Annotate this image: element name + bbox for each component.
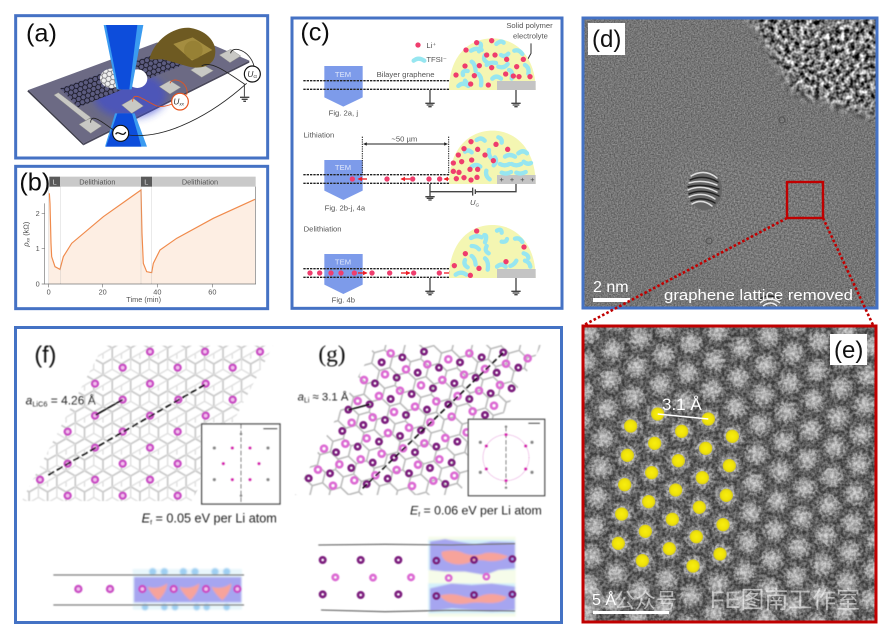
formation energy: E <box>142 511 151 525</box>
electrolyte dome <box>449 131 536 184</box>
delithiation label: Delithiation <box>304 225 342 234</box>
resistivity curve <box>49 190 255 273</box>
label: lattice constant: Li <box>304 398 310 405</box>
icon: gate voltage meter: U <box>247 69 253 79</box>
icon: gate voltage meter <box>244 66 260 82</box>
TEM window: TEM <box>335 70 351 79</box>
yellow lithium markers <box>612 407 739 573</box>
lithium lattice region <box>662 150 848 280</box>
legend: Li+ and TFSI- <box>414 41 447 64</box>
axis tick labels: 20 <box>99 287 107 296</box>
label: lattice constant: a <box>298 391 304 403</box>
gate circuit <box>425 184 516 207</box>
heading: (d): (d) <box>592 26 621 53</box>
axis tick labels: 40 <box>153 287 161 296</box>
ground symbol <box>240 97 249 101</box>
axis tick labels: 0 <box>47 287 51 296</box>
bilayer graphene lines <box>303 81 449 89</box>
zoom connector lines <box>584 218 873 325</box>
phase header bars: Delithiation <box>79 177 115 186</box>
measurement: 3.1 angstrom <box>658 395 708 419</box>
small defect clusters <box>644 117 785 306</box>
dashed line and lattice vector <box>348 351 505 488</box>
ground symbols <box>425 278 521 295</box>
icon: AC source <box>113 125 129 141</box>
lithiation label: Lithiation <box>304 130 334 139</box>
amorphous region top right <box>743 20 876 126</box>
watermark <box>578 587 860 614</box>
gate circuit: G <box>476 202 480 207</box>
panel: (b) resistivity chart <box>16 166 268 309</box>
structure (f) <box>20 341 280 610</box>
label: lattice constant: = 4.26 Å <box>47 392 96 407</box>
electrolyte dome <box>449 38 536 90</box>
TEM window: TEM <box>335 163 351 172</box>
panel border <box>583 18 877 308</box>
electrolyte label <box>506 21 553 61</box>
heading: (g): (g) <box>318 342 346 368</box>
axis title: time: Time (min) <box>126 295 161 304</box>
axis tick labels: 0 <box>36 280 40 289</box>
label: lattice constant: LiC6 <box>32 400 47 409</box>
graphene ribbon <box>60 53 187 107</box>
axes and ticks <box>42 187 256 287</box>
structure (g) <box>295 342 545 617</box>
heading: (e) <box>830 334 867 365</box>
axis title: resistivity: (kΩ) <box>21 222 30 238</box>
heading: (a): (a) <box>26 19 57 47</box>
bilayer graphene lines <box>303 269 449 277</box>
formation energy: f <box>418 512 420 519</box>
electrolyte label: electrolyte <box>513 31 548 40</box>
state: pristine <box>303 38 536 118</box>
heading: (f): (f) <box>34 341 56 367</box>
device substrate <box>27 39 249 145</box>
axis title: resistivity: xx <box>26 237 31 242</box>
formation energy: f <box>150 520 152 527</box>
phase header bars <box>49 177 256 187</box>
icon: longitudinal voltage meter <box>172 93 188 110</box>
label: lattice constant: a <box>26 393 33 407</box>
electrolyte dome: + <box>500 175 504 184</box>
icon: longitudinal voltage meter: U <box>173 97 179 107</box>
axis tick labels: 1 <box>36 244 40 253</box>
bilayer graphene label: Bilayer graphene <box>377 70 435 79</box>
polymer electrolyte dome <box>149 28 215 68</box>
state: delithiation <box>303 225 536 304</box>
panel: (f)(g) simulated structures <box>16 328 562 622</box>
axis tick labels <box>36 209 216 296</box>
scale bar: 2 nm: 2 nm <box>593 279 629 296</box>
measurement wiring <box>91 49 254 136</box>
electrolyte dome: + <box>520 175 524 184</box>
panel: (d) TEM image <box>583 18 877 308</box>
contact bar and pads <box>54 49 241 133</box>
TEM window <box>324 160 363 200</box>
scale bar: 5 angstrom: 5 Å <box>592 590 616 609</box>
heading: (b): (b) <box>19 168 50 196</box>
icon: gate voltage meter: G <box>253 74 257 80</box>
amorphous particle <box>688 170 722 210</box>
scale bar: 5 angstrom <box>592 590 669 614</box>
measurement: 3.1 angstrom: 3.1 Å <box>662 395 702 414</box>
LiC6 lattice <box>20 345 277 502</box>
50 micron dimension <box>362 134 449 175</box>
dense lithium lattice <box>295 345 542 495</box>
zoom region marker <box>787 182 823 218</box>
orange voltage wires <box>133 80 187 106</box>
formation energy: E <box>410 503 419 517</box>
charge density map <box>133 568 242 610</box>
area under curve <box>49 190 255 284</box>
figure reference: Fig. 2b-j, 4a <box>325 204 366 213</box>
TEM holes <box>100 69 147 88</box>
electrolyte dome <box>449 225 536 278</box>
panel: (e) magnified lattice <box>578 326 876 622</box>
legend: Li+ and TFSI-: TFSI⁻ <box>426 55 447 64</box>
red arrows: outward <box>358 271 453 275</box>
phase header bars: Delithiation <box>182 177 218 186</box>
intercalated lithium <box>350 176 442 182</box>
charge density map <box>428 537 516 617</box>
bilayer graphene lines <box>303 175 449 183</box>
electron beam <box>104 25 147 147</box>
heading: (d) <box>588 23 625 55</box>
diffraction inset <box>202 424 280 504</box>
gate circuit: U <box>470 198 476 207</box>
TEM window: TEM <box>335 257 351 266</box>
state: lithiation <box>303 130 536 213</box>
50 micron dimension: ~50 µm <box>391 134 417 143</box>
axis tick labels: 2 <box>36 209 40 218</box>
red arrows: inward <box>358 177 453 181</box>
heading: (e): (e) <box>834 337 863 364</box>
icon: longitudinal voltage meter: xx <box>178 102 185 107</box>
intercalated lithium <box>307 270 442 276</box>
bilayer edge view <box>53 575 244 605</box>
formation energy: = 0.06 eV per Li atom <box>420 503 542 517</box>
phase header bars: L <box>144 177 148 186</box>
electrolyte label: Solid polymer <box>506 21 553 30</box>
figure reference: Fig. 2a, j <box>329 109 358 118</box>
caption: graphene lattice removed: graphene lattice removed <box>664 287 853 304</box>
bilayer edge view <box>318 544 515 612</box>
legend: Li+ and TFSI-: Li⁺ <box>426 41 436 50</box>
figure reference: Fig. 4b <box>332 295 355 304</box>
electrolyte dome: + <box>530 175 534 184</box>
heading: (c): (c) <box>300 19 330 47</box>
TEM window <box>324 254 363 294</box>
watermark: 公众号 <box>614 590 677 613</box>
electrolyte dome: + <box>510 175 514 184</box>
panel: (c) lithiation schematic <box>292 18 562 308</box>
dashed line and lattice vector <box>48 384 207 475</box>
label: lattice constant: ≈ 3.1 Å <box>309 390 349 403</box>
axis title: resistivity: ρ <box>21 242 30 248</box>
TEM window <box>324 66 363 107</box>
formation energy: = 0.05 eV per Li atom <box>152 511 277 525</box>
axis tick labels: 60 <box>208 287 216 296</box>
ground symbols <box>425 90 521 107</box>
diffraction inset <box>468 419 545 496</box>
panel: (a) device schematic <box>16 16 268 158</box>
image grain <box>583 326 875 621</box>
watermark: FE图南工作室 <box>710 587 860 614</box>
phase header bars: L <box>53 177 57 186</box>
panel border <box>583 326 876 622</box>
